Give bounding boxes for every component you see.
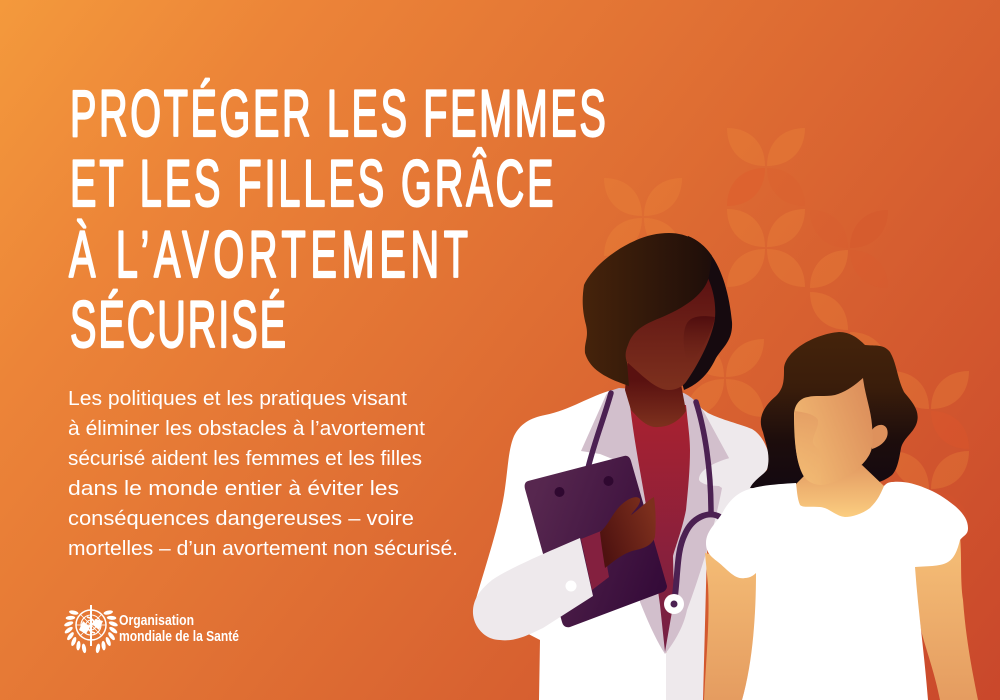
logo text: mondiale de la Santé (119, 629, 239, 645)
stethoscope tube (696, 402, 711, 512)
doctor back hair (670, 236, 732, 390)
clipboard dots (554, 476, 614, 497)
icon: WHO emblem (64, 605, 118, 653)
title: SÉCURISÉ (70, 288, 286, 362)
logo: World Health Organization (64, 605, 239, 653)
title: PROTÉGER LES FEMMES (70, 77, 606, 151)
stethoscope left strap (588, 393, 611, 468)
girl neck (796, 465, 890, 525)
logo text (119, 613, 239, 645)
cuff (581, 531, 609, 590)
shirt (630, 405, 690, 652)
body text: mortelles – d’un avortement non sécurisé. (68, 538, 458, 560)
title: À L’AVORTEMENT (69, 218, 468, 292)
clipboard (525, 456, 667, 627)
left collar (581, 388, 640, 470)
doctor nose shadow (675, 316, 715, 375)
illustration: doctor (473, 233, 771, 700)
girl hair (750, 332, 918, 490)
sleeve button (566, 580, 576, 592)
girl left arm (704, 553, 760, 700)
body text: conséquences dangereuses – voire (68, 508, 414, 530)
title (69, 77, 606, 362)
coat pocket fold (699, 458, 730, 486)
lapels (619, 388, 729, 654)
illustration: girl (704, 332, 978, 700)
lab coat left (474, 390, 666, 700)
body text (68, 388, 458, 560)
stethoscope lower tube (675, 514, 720, 596)
doctor face (625, 278, 715, 390)
body text: dans le monde entier à éviter les (68, 478, 399, 500)
stethoscope head (664, 594, 684, 614)
lab coat right (666, 392, 771, 700)
girl face (794, 378, 873, 485)
body text: sécurisé aident les femmes et les filles (68, 448, 422, 470)
girl ear (872, 425, 888, 449)
decorative leaf pattern (604, 128, 969, 529)
doctor sleeve (473, 538, 593, 640)
girl right arm (912, 535, 978, 700)
girl t-shirt (706, 482, 968, 700)
body text: Les politiques et les pratiques visant (68, 388, 407, 410)
doctor neck (625, 355, 686, 427)
hand (600, 497, 656, 568)
body text: à éliminer les obstacles à l’avortement (68, 418, 425, 440)
doctor hair (583, 233, 712, 386)
title: ET LES FILLES GRÂCE (70, 147, 554, 221)
logo text: Organisation (119, 613, 194, 629)
girl face shading (794, 411, 821, 485)
